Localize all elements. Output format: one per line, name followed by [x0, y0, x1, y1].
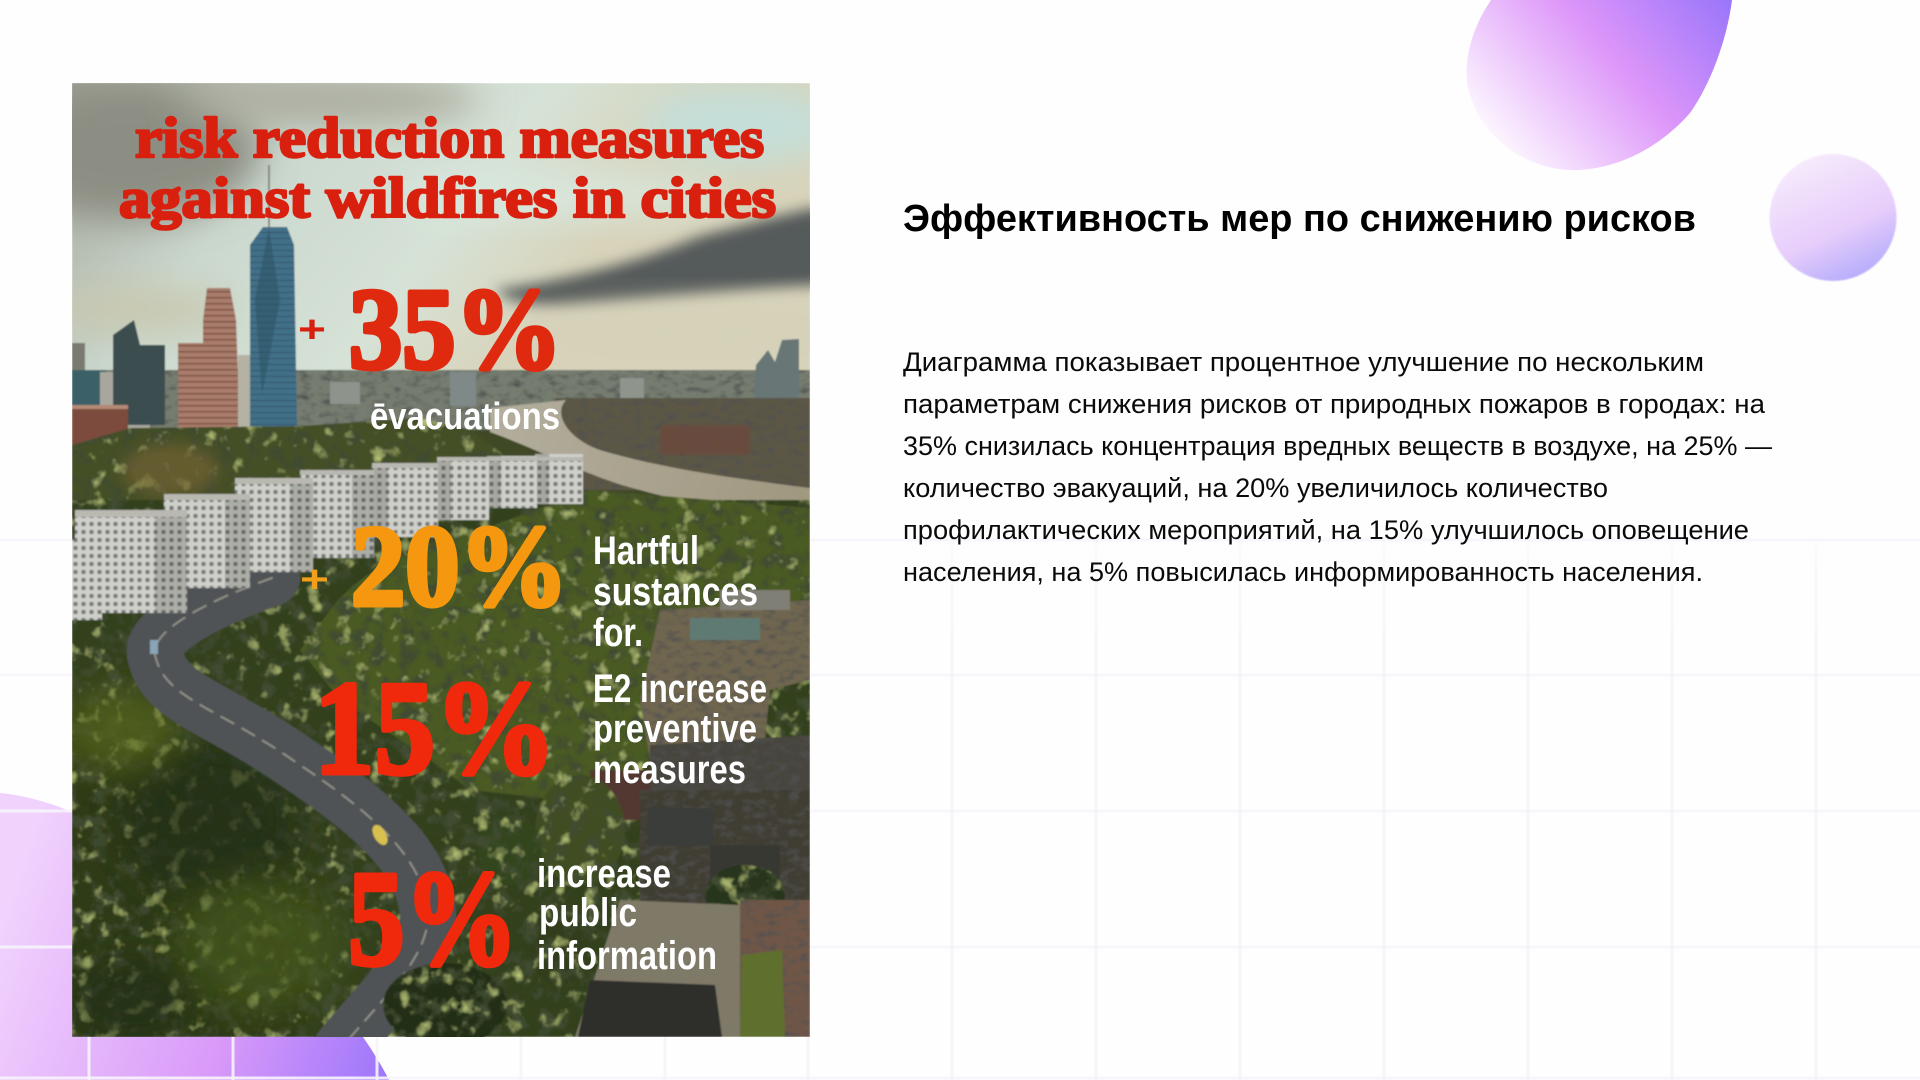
stat: 20% harmful substances: for. [593, 611, 643, 655]
stat: 5% public information [350, 858, 715, 970]
body text: 35% снизилась концентрация вредных веществ в воздухе, на 25% — [903, 431, 1773, 461]
body text: населения, на 5% повысилась информированность населения. [903, 557, 1703, 587]
left dark forest [74, 784, 278, 1037]
top-right gradient blob [1467, 0, 1732, 170]
body text: профилактических мероприятий, на 15% улучшилось оповещение [903, 515, 1749, 545]
bottom right buildings [382, 830, 810, 1037]
skyline [72, 165, 810, 447]
stat: 35% evacuations: 35% [349, 266, 562, 394]
body text: Диаграмма показывает процентное улучшение по нескольким [903, 347, 1704, 377]
stat: 20% harmful substances: sustances [593, 570, 758, 614]
body text: количество эвакуаций, на 20% увеличилось количество [903, 473, 1608, 503]
stat: 15% preventive measures: measures [593, 748, 746, 792]
stat: 5% public information: public [539, 891, 637, 935]
winding road [150, 578, 428, 1050]
background grid [0, 540, 1920, 1080]
poster title: against wildfires in cities [119, 167, 776, 230]
stat: 35% evacuations: + [298, 309, 326, 351]
stat: 20% harmful substances: 20% [351, 503, 568, 631]
photo scene [72, 83, 810, 1037]
river [490, 400, 810, 508]
stat: 5% public information: information [537, 934, 717, 978]
bottom-left gradient blob [0, 793, 389, 1080]
stat: 35% evacuations: ēvacuations [370, 396, 560, 438]
stat: 20% harmful substances [300, 503, 758, 655]
apartment blocks [72, 454, 583, 620]
stat: 15% preventive measures: E2 increase [593, 667, 767, 711]
ground base [470, 429, 664, 497]
stat: 20% harmful substances: Hartful [593, 529, 699, 573]
body text: параметрам снижения рисков от природных пожаров в городах: на [903, 389, 1765, 419]
poster title: risk reduction measures [135, 107, 764, 170]
body text [903, 347, 1773, 587]
stat: 15% preventive measures [314, 654, 767, 802]
heading: Эффективность мер по снижению рисков [903, 198, 1696, 240]
upper-right bright trees [300, 490, 810, 800]
stat: 5% public information: increase [537, 852, 671, 896]
gradient circle [1770, 154, 1896, 281]
poster title [119, 107, 776, 230]
right old buildings [535, 590, 810, 925]
far city right of river [555, 398, 810, 490]
stat: 15% preventive measures: preventive [593, 707, 757, 751]
stat: 35% evacuations [298, 266, 562, 438]
ground forest [72, 500, 810, 1037]
sky with clouds [72, 83, 810, 371]
stat: 20% harmful substances: + [300, 559, 329, 601]
mid trees [72, 418, 502, 500]
stat: 5% public information: 5% [348, 844, 518, 994]
stat: 15% preventive measures: 15% [314, 654, 556, 802]
panel: poster image [72, 83, 810, 1037]
